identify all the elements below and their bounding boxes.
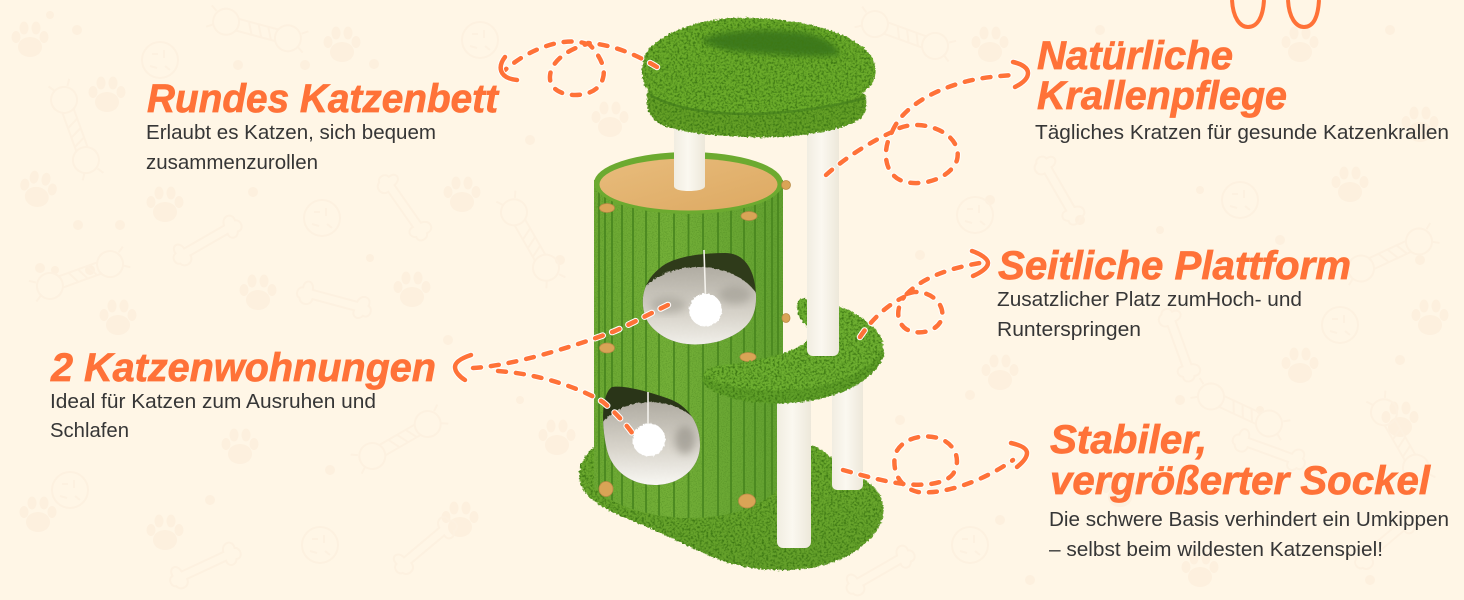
description: Schlafen [50, 420, 129, 442]
description [1049, 509, 1449, 561]
heading: Krallenpflege [1037, 74, 1287, 118]
front lower post [777, 390, 811, 548]
ear outlines at top right [1232, 0, 1319, 27]
heading: 2 Katzenwohnungen [50, 346, 436, 390]
description: Zusatzlicher Platz zumHoch- und [997, 289, 1302, 311]
description [50, 391, 376, 442]
description: zusammenzurollen [146, 152, 318, 174]
cylinder body [594, 152, 790, 525]
callout: 2 Katzenwohnungen [50, 346, 436, 442]
arrow: side platform [860, 251, 988, 337]
hanging ball lower [632, 392, 666, 456]
description [146, 122, 436, 174]
heading [1037, 34, 1287, 118]
short top post [674, 125, 705, 191]
callout: Stabiler, vergrößerter Sockel [1049, 418, 1449, 561]
vertical stripes [599, 190, 778, 525]
arrow: base [843, 436, 1027, 492]
description: Erlaubt es Katzen, sich bequem [146, 122, 436, 144]
arrow: claw care [826, 62, 1028, 183]
description: Ideal für Katzen zum Ausruhen und [50, 391, 376, 413]
description: Tägliches Kratzen für gesunde Katzenkrallen [1035, 122, 1449, 144]
lower cat house opening [603, 386, 700, 485]
cat tree product [579, 18, 884, 570]
rim [594, 152, 783, 214]
heading: Natürliche [1037, 34, 1233, 78]
heading: vergrößerter Sockel [1050, 459, 1431, 503]
heading: Stabiler, [1050, 418, 1207, 462]
wooden pegs [599, 180, 790, 508]
heading [1050, 418, 1431, 503]
heading: Rundes Katzenbett [147, 77, 500, 121]
round cat bed [642, 18, 876, 137]
description: Die schwere Basis verhindert ein Umkippen [1049, 509, 1449, 531]
description [997, 289, 1302, 341]
upper cat house opening [642, 253, 756, 344]
base [579, 445, 883, 570]
wooden top [600, 158, 778, 210]
hanging ball upper [689, 250, 722, 326]
side platform [702, 299, 884, 404]
callout: Natürliche Krallenpflege [1035, 34, 1449, 144]
callout: Seitliche Plattform [997, 244, 1351, 341]
description: – selbst beim wildesten Katzenspiel! [1049, 539, 1383, 561]
rear lower post [832, 375, 863, 490]
arrow: cat houses [455, 303, 672, 437]
tall post [807, 125, 839, 356]
heading: Seitliche Plattform [998, 244, 1351, 288]
arrow: bed [501, 42, 657, 95]
callout: Rundes Katzenbett [146, 77, 500, 174]
description: Runterspringen [997, 319, 1141, 341]
